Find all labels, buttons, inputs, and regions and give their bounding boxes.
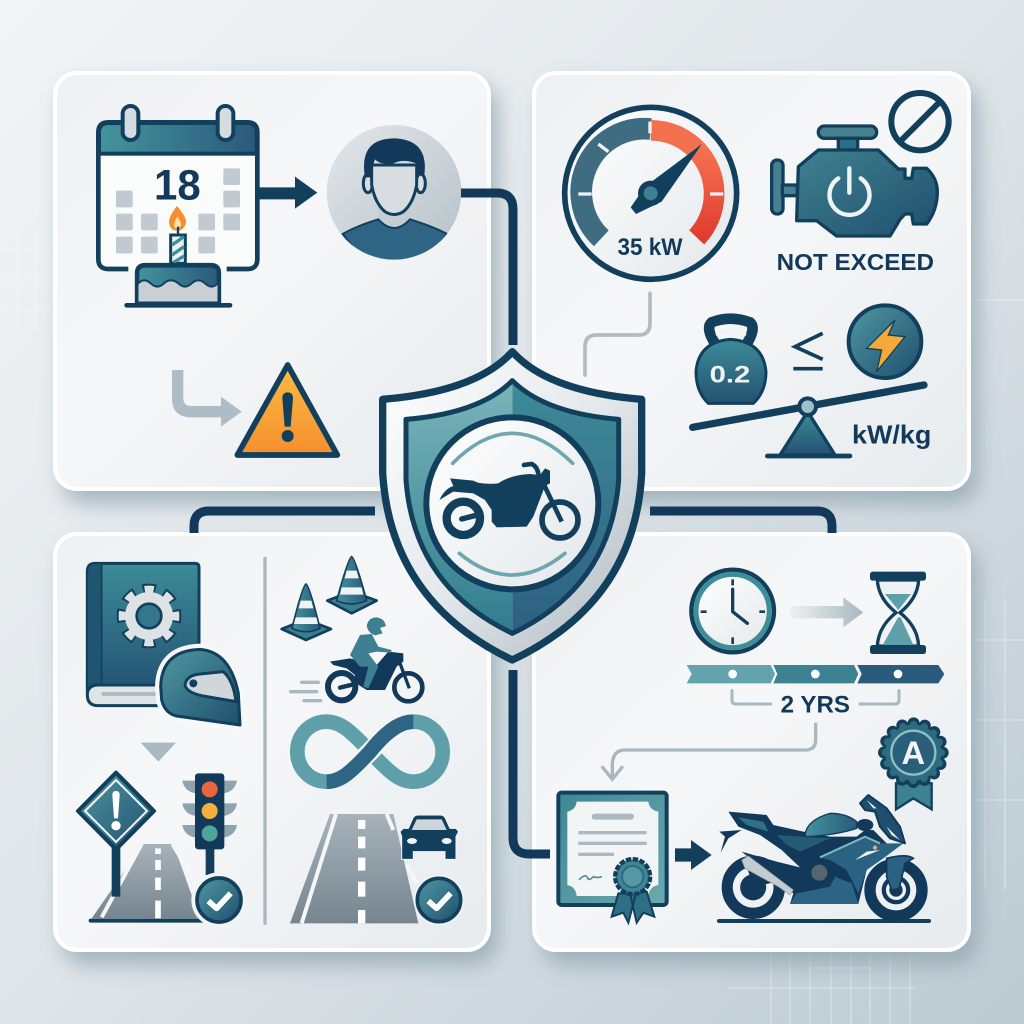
icon: motorcycle rider xyxy=(291,617,422,701)
text: 2 yrs: 2 YRS xyxy=(781,692,850,719)
icon: road left xyxy=(91,844,203,921)
icon: infinity loop xyxy=(297,722,443,782)
icon: power symbol xyxy=(829,168,869,215)
icon: theory book xyxy=(87,563,199,706)
text: not exceed: NOT EXCEED xyxy=(777,249,934,275)
panel: experience and upgrade xyxy=(534,534,978,965)
icon: check badge left xyxy=(191,872,247,928)
icon: kettlebell 0.2: 0.2 xyxy=(710,362,750,389)
icon: engine xyxy=(772,126,937,236)
bracket: two year span xyxy=(732,691,899,704)
icon: motorcycle silhouette xyxy=(439,464,578,538)
emblem circle xyxy=(426,417,598,589)
icon: certificate seal xyxy=(612,859,654,923)
panel: age requirement xyxy=(55,73,498,504)
icon: road right xyxy=(290,814,418,923)
text: kW/kg: kW/kg xyxy=(852,419,931,449)
arrow: clock to hourglass xyxy=(790,597,863,627)
arrow: age to rider xyxy=(259,177,317,209)
icon: candle flame xyxy=(169,206,186,231)
icon: kettlebell 0.2 xyxy=(696,319,766,403)
icon: balance seesaw xyxy=(693,385,924,456)
central shield emblem xyxy=(383,352,642,660)
icon: warning triangle xyxy=(237,365,337,455)
icon: traffic light xyxy=(182,773,237,875)
icon: birthday calendar: 18 xyxy=(154,161,201,209)
icon: birthday cake xyxy=(137,265,219,303)
icon: lightning circle xyxy=(849,305,921,378)
icon: check badge right xyxy=(414,875,464,925)
connector: timeline to certificate xyxy=(603,724,816,779)
shield inner left xyxy=(406,381,512,633)
icon: class A badge xyxy=(884,723,943,809)
arrow: certificate to motorcycle xyxy=(675,840,712,870)
icon: sport motorcycle xyxy=(719,795,929,921)
connectors: flow lines between panels xyxy=(194,193,832,854)
icon: warning road sign xyxy=(78,773,154,897)
chart: 35 kW gauge: 35 kW xyxy=(617,234,683,261)
icon: certificate xyxy=(558,793,667,923)
icon: clock xyxy=(691,570,774,652)
icon: birthday calendar xyxy=(98,106,257,305)
icon: class A badge: A xyxy=(902,734,925,771)
symbol: less than or equal xyxy=(793,333,823,369)
icon: car xyxy=(400,815,459,859)
icon: hourglass xyxy=(870,572,926,654)
chart: timeline chevrons xyxy=(687,665,944,683)
icon: prohibited sign xyxy=(891,93,949,150)
connector: gauge to shield xyxy=(585,293,650,375)
icon: rider portrait xyxy=(327,125,461,267)
shield inner right xyxy=(512,381,619,633)
panel: power limits xyxy=(534,73,978,504)
icon: cones xyxy=(282,557,377,640)
arrow: grey bent arrow xyxy=(172,370,242,427)
icon: helmet xyxy=(161,649,240,725)
chart: 35 kW gauge xyxy=(565,107,737,279)
arrow: down triangle xyxy=(141,743,176,762)
divider xyxy=(260,558,270,923)
panel: training xyxy=(55,534,498,965)
icon: gear xyxy=(122,589,176,643)
